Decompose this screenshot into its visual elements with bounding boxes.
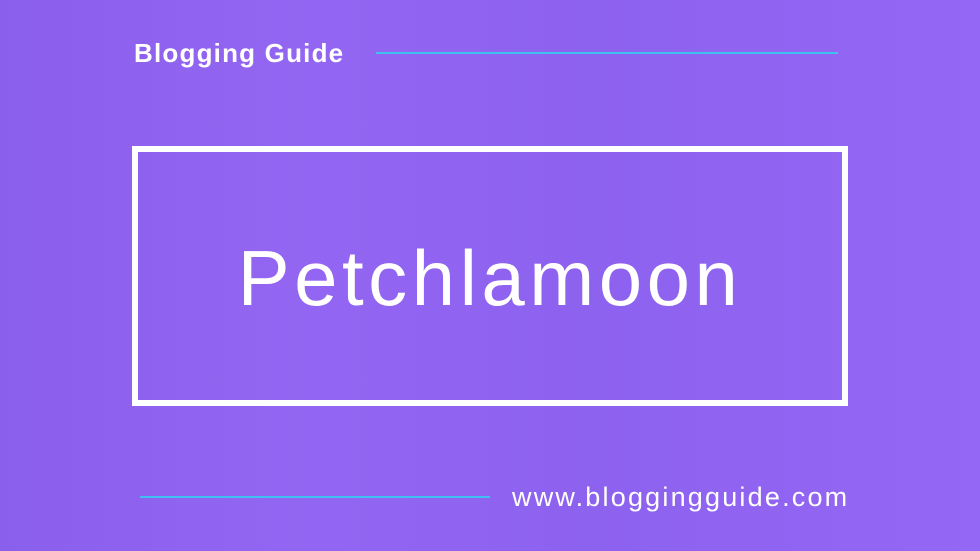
heading: Blogging Guide: Blogging Guide (134, 38, 344, 68)
title frame (132, 146, 848, 406)
title: Petchlamoon: Petchlamoon (238, 234, 742, 322)
footer url: www.bloggingguide.com (512, 482, 849, 512)
